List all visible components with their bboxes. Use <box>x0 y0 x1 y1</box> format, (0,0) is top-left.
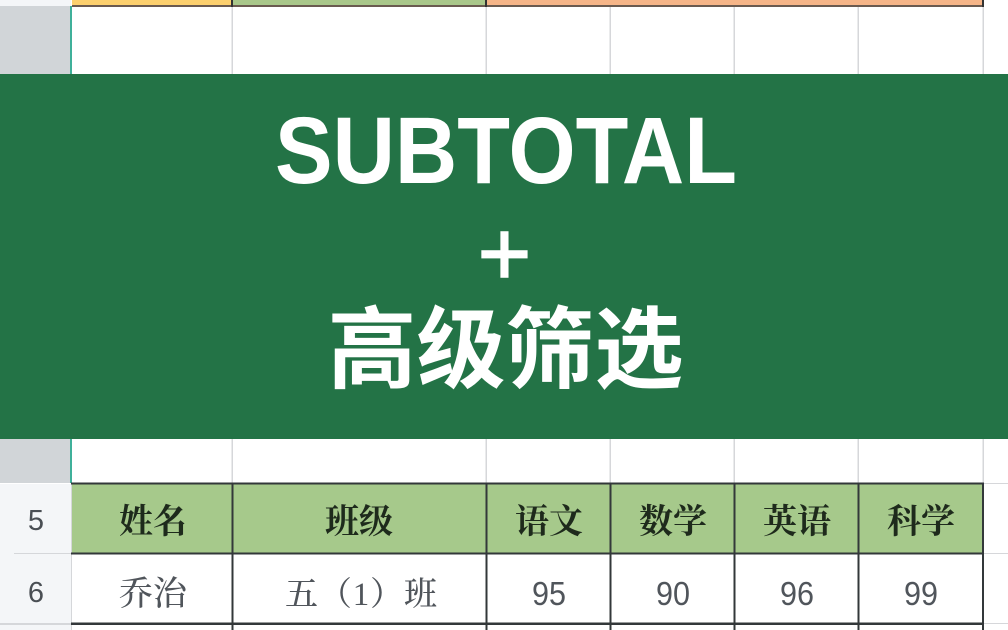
selected row header cells <box>0 6 72 483</box>
row number column <box>0 484 72 630</box>
header: 姓名: 姓名 <box>119 503 187 541</box>
cell: science score: 99 <box>904 575 938 612</box>
header: 科学: 科学 <box>887 503 955 541</box>
table header row <box>72 484 983 553</box>
plus sign: + <box>478 203 531 305</box>
header: 数学: 数学 <box>639 503 707 541</box>
header: 班级: 班级 <box>325 503 393 541</box>
title: 高级筛选: 高级筛选 <box>328 278 684 407</box>
cell: Chinese score: 95 <box>532 575 566 612</box>
cell: math score: 90 <box>656 575 690 612</box>
empty grid lines <box>232 7 1008 630</box>
table borders <box>71 482 984 630</box>
header: 语文: 语文 <box>515 503 583 541</box>
green title banner <box>0 74 1008 439</box>
cell: English score: 96 <box>780 575 814 612</box>
row number 5: 5 <box>28 505 44 537</box>
top coloured header strip <box>0 0 984 7</box>
header: 英语: 英语 <box>763 503 831 541</box>
cell: name: 乔治 <box>119 575 189 613</box>
row number 6: 6 <box>28 577 44 609</box>
cell: class: 五（1）班 <box>285 576 437 613</box>
title: SUBTOTAL: SUBTOTAL <box>275 98 737 204</box>
data row 6 <box>119 575 938 613</box>
